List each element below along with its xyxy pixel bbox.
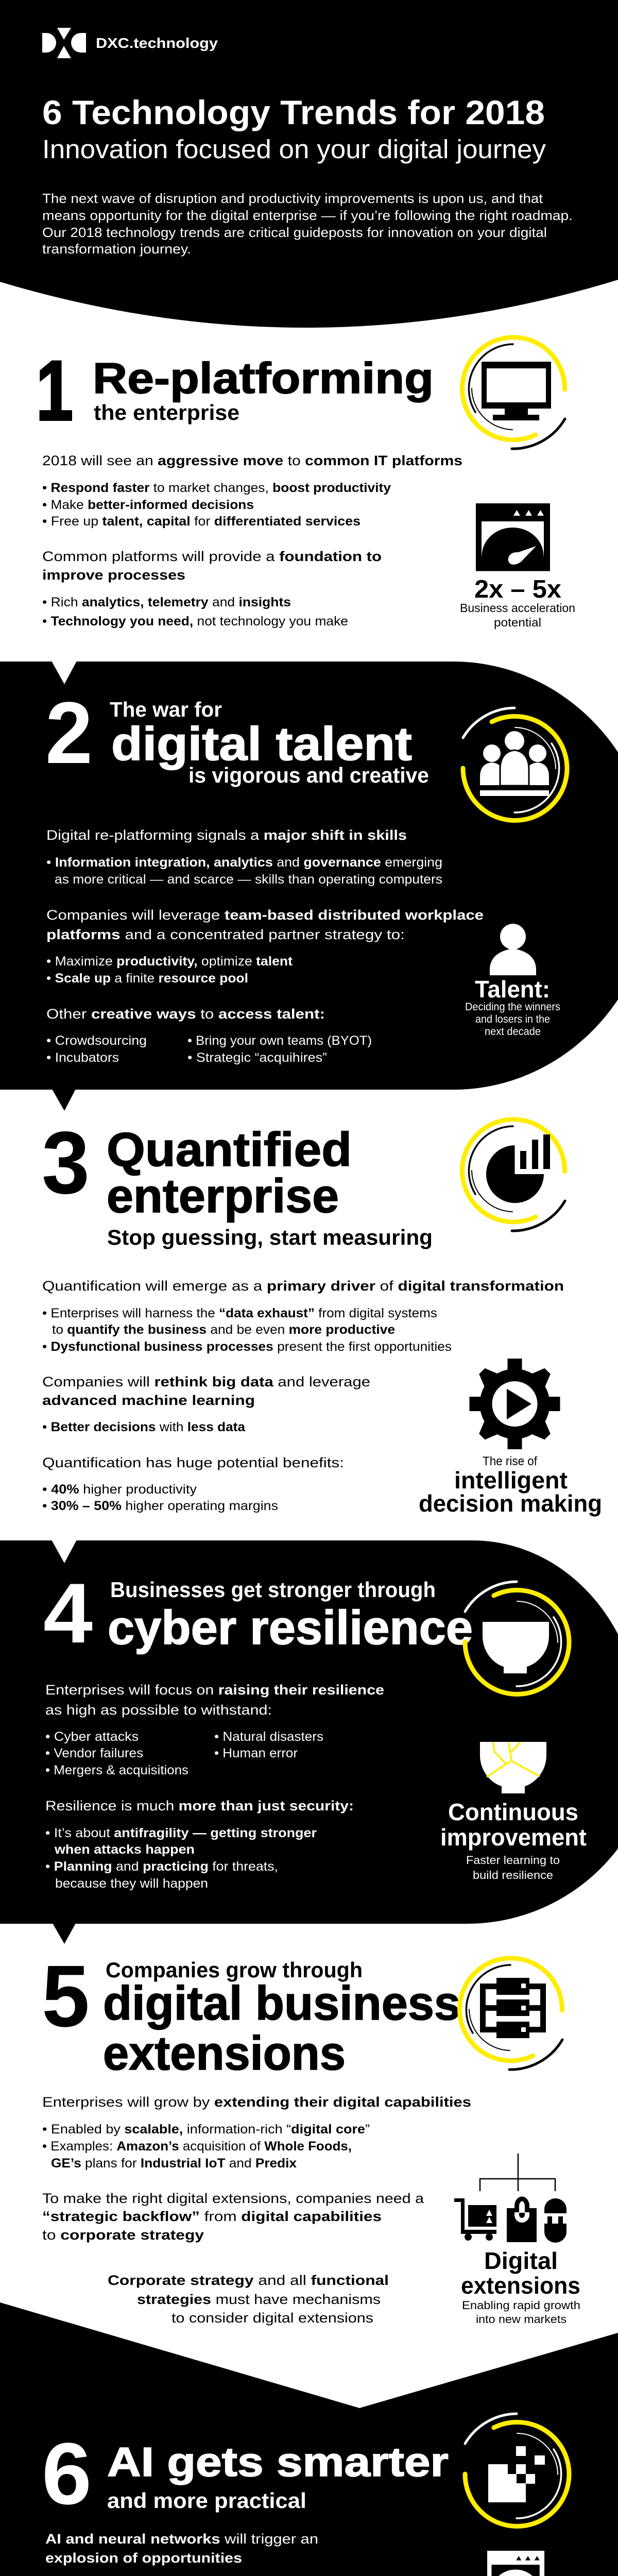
panel: trend 4 cyber resilience: [0, 1540, 618, 1944]
bullets: [45, 1826, 317, 1891]
number 2: 2: [45, 684, 93, 782]
logo wordmark: DXC.technology: [96, 35, 218, 51]
intro paragraph: transformation journey.: [42, 241, 191, 257]
heading: AI gets smarter: [107, 2439, 449, 2485]
benefits text: Quantification has huge potential benefits:: [42, 1455, 344, 1470]
bullets: when attacks happen: [54, 1842, 195, 1857]
icon: speedometer window: [476, 503, 550, 571]
number 1: 1: [36, 343, 73, 438]
intro paragraph: [42, 191, 573, 257]
number 3: 3: [42, 1113, 90, 1212]
subheading: Stop guessing, start measuring: [107, 1225, 433, 1249]
bullet: • Better decisions with less data: [42, 1420, 246, 1434]
heading: digital talent: [111, 718, 412, 770]
bullets: • Information integration, analytics and governance emerging: [46, 855, 442, 870]
icon: team at table: [463, 708, 567, 820]
bullets: • Free up talent, capital for differentiated services: [42, 514, 360, 529]
callout: digital extensions: extensions: [461, 2272, 580, 2299]
icon: cart, bag, plug tree: [454, 2154, 566, 2243]
lead text: Enterprises will focus on raising their resilience: [45, 1682, 384, 1698]
big data text: Companies will rethink big data and leverage: [42, 1374, 370, 1389]
icon: DXC logo: [42, 28, 86, 58]
number 5: 5: [42, 1947, 90, 2045]
security text: Resilience is much more than just security:: [45, 1798, 354, 1814]
icon: speedometer window inverted: [487, 2551, 544, 2576]
bullets: • Mergers & acquisitions: [45, 1763, 188, 1777]
callout: continuous improvement: Continuous: [448, 1799, 578, 1825]
bullets: • Cyber attacks: [45, 1730, 139, 1744]
stat caption: [460, 601, 575, 629]
panel: trend 6 AI gets smarter: [0, 2302, 618, 2576]
icon: gear with play button: [470, 1359, 560, 1449]
workplace text: [46, 907, 484, 942]
bullets: [46, 1033, 372, 1065]
bullets: [42, 481, 391, 529]
icon: server rack: [460, 1958, 562, 2070]
lead text: Quantification will emerge as a primary driver of digital transformation: [42, 1278, 564, 1294]
bullets: • Examples: Amazon’s acquisition of Whole Foods,: [42, 2139, 352, 2154]
callout: intelligent decision making: decision making: [419, 1490, 602, 1517]
bullets: • Planning and practicing for threats,: [45, 1859, 278, 1874]
big data text: advanced machine learning: [42, 1393, 255, 1408]
foundation text: improve processes: [42, 567, 185, 583]
title: 6 Technology Trends for 2018: [42, 93, 545, 131]
lead text: as high as possible to withstand:: [45, 1702, 272, 1718]
backflow text: To make the right digital extensions, companies need a: [42, 2191, 424, 2206]
lead text: [45, 1682, 384, 1718]
icon: pie and bars: [462, 1120, 565, 1231]
callout: continuous improvement: improvement: [440, 1824, 587, 1851]
heading: extensions: [103, 2026, 346, 2080]
bullets: to quantify the business and be even more productive: [52, 1323, 395, 1337]
callout: digital extensions: [461, 2247, 580, 2326]
callout caption: and losers in the: [475, 1013, 550, 1025]
bullets: • It’s about antifragility — getting stronger: [45, 1826, 317, 1840]
bullets: • 40% higher productivity: [42, 1482, 197, 1497]
callout: continuous improvement: build resilience: [473, 1869, 553, 1882]
icon: bowl: [465, 1582, 569, 1694]
bullets: • Vendor failures: [45, 1746, 143, 1760]
heading: Re-platforming: [93, 354, 434, 402]
heading: [107, 1123, 352, 1223]
callout: intelligent decision making: intelligent: [454, 1467, 568, 1494]
heading small: The war for: [110, 698, 222, 721]
bullets: • Incubators: [46, 1050, 119, 1065]
lead text: AI and neural networks will trigger an: [45, 2531, 318, 2547]
intro paragraph: means opportunity for the digital enterprise — if you’re following the right roadmap.: [42, 208, 573, 223]
heading small: Companies grow through: [106, 1958, 363, 1982]
panel: trend 1 re-platforming: [36, 337, 575, 629]
bullets: • Crowdsourcing: [46, 1033, 147, 1048]
lead text: 2018 will see an aggressive move to common IT platforms: [42, 453, 462, 468]
workplace text: Companies will leverage team-based distributed workplace: [46, 907, 484, 923]
bullets: [42, 595, 348, 629]
centred statement: to consider digital extensions: [171, 2310, 373, 2326]
bullets: • Maximize productivity, optimize talent: [46, 954, 293, 969]
bullets: • Dysfunctional business processes present the first opportunities: [42, 1340, 452, 1354]
icon: mended bowl: [480, 1742, 546, 1793]
bullets: [46, 855, 442, 887]
panel: trend 5 digital business extensions: [42, 1947, 580, 2326]
panel: trend 2 digital talent: [0, 661, 618, 1111]
centred statement: [108, 2273, 389, 2326]
bullets: • Human error: [214, 1746, 298, 1760]
lead text: [45, 2531, 318, 2566]
callout: continuous improvement: [440, 1799, 587, 1882]
stat caption: potential: [494, 616, 541, 629]
centred statement: Corporate strategy and all functional: [108, 2273, 389, 2288]
big data text: [42, 1374, 370, 1408]
stat caption: Business acceleration: [460, 601, 575, 615]
bullets: [42, 1482, 278, 1513]
heading: enterprise: [107, 1169, 339, 1223]
heading small: Businesses get stronger through: [110, 1578, 436, 1602]
callout caption: [465, 1001, 560, 1038]
number 4: 4: [43, 1566, 93, 1660]
intro paragraph: Our 2018 technology trends are critical guideposts for innovation on your digital: [42, 225, 547, 240]
callout: talent: Talent:: [475, 976, 550, 1003]
intro paragraph: The next wave of disruption and productivity improvements is upon us, and that: [42, 191, 543, 206]
bullets: • Enterprises will harness the “data exhaust” from digital systems: [42, 1306, 437, 1320]
panel: header: [0, 0, 618, 328]
bullets: [42, 1306, 452, 1354]
bullets: • Respond faster to market changes, boost productivity: [42, 481, 391, 495]
other ways text: Other creative ways to access talent:: [46, 1006, 325, 1022]
lead text: explosion of opportunities: [45, 2550, 242, 2566]
backflow text: [42, 2191, 424, 2243]
bullets: • Strategic “acquihires”: [187, 1050, 327, 1065]
bullets: [45, 1730, 323, 1777]
lead text: Enterprises will grow by extending their digital capabilities: [42, 2094, 471, 2110]
heading: Quantified: [107, 1123, 352, 1176]
heading: [103, 1976, 460, 2080]
centred statement: strategies must have mechanisms: [137, 2292, 381, 2307]
stat: 2x-5x: 2x – 5x: [474, 575, 561, 603]
callout: digital extensions: Enabling rapid growth: [462, 2299, 580, 2312]
bullets: • Bring your own teams (BYOT): [187, 1033, 372, 1048]
backflow text: “strategic backflow” from digital capabilities: [42, 2209, 382, 2224]
bullets: as more critical — and scarce — skills than operating computers: [55, 872, 442, 887]
bullets: • Scale up a finite resource pool: [46, 971, 248, 986]
number 6: 6: [42, 2425, 92, 2523]
callout: continuous improvement: Faster learning to: [466, 1854, 560, 1867]
bullets: because they will happen: [55, 1876, 208, 1891]
bullets: • Make better-informed decisions: [42, 498, 254, 512]
subheading: is vigorous and creative: [188, 763, 429, 787]
bullets: [42, 2122, 370, 2171]
bullets: GE’s plans for Industrial IoT and Predix: [51, 2156, 297, 2171]
lead text: Digital re-platforming signals a major shift in skills: [46, 827, 407, 843]
callout: digital extensions: Digital: [484, 2247, 558, 2274]
heading: digital business: [103, 1976, 460, 2030]
icon: person: [490, 924, 536, 975]
callout caption: Deciding the winners: [465, 1001, 560, 1013]
callout: intelligent decision making: [419, 1454, 602, 1517]
bullets: • 30% – 50% higher operating margins: [42, 1499, 278, 1513]
subheading: the enterprise: [94, 400, 239, 425]
icon: monitor: [462, 337, 565, 449]
foundation text: Common platforms will provide a foundation to: [42, 549, 382, 564]
heading: cyber resilience: [108, 1601, 473, 1654]
callout: intelligent decision making: The rise of: [483, 1454, 537, 1468]
subheading: and more practical: [107, 2488, 306, 2513]
panel: trend 3 quantified enterprise: [42, 1113, 602, 1517]
bullets: [46, 954, 293, 986]
backflow text: to corporate strategy: [42, 2227, 204, 2243]
callout caption: next decade: [485, 1026, 541, 1038]
foundation text: [42, 549, 382, 583]
bullets: • Technology you need, not technology you make: [42, 614, 348, 629]
bullets: • Rich analytics, telemetry and insights: [42, 595, 291, 609]
bullets: • Enabled by scalable, information-rich “ digital core ”: [42, 2122, 370, 2137]
workplace text: platforms and a concentrated partner strategy to:: [46, 927, 405, 942]
subtitle: Innovation focused on your digital journey: [42, 134, 546, 164]
callout: digital extensions: into new markets: [476, 2313, 566, 2326]
icon: pixel dissolve: [465, 2414, 569, 2526]
bullets: • Natural disasters: [214, 1730, 323, 1744]
